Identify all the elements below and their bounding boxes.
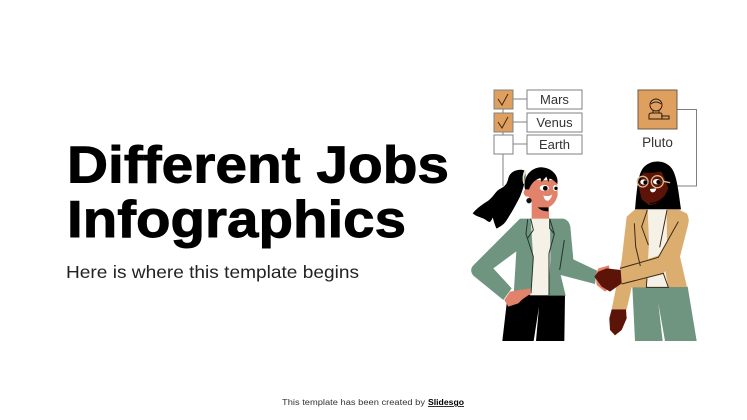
trousers (632, 287, 697, 341)
shirt (530, 219, 550, 295)
footer credit: This template has been created by (282, 398, 425, 407)
ponytail (473, 170, 525, 229)
earring (526, 198, 532, 203)
title (67, 136, 449, 249)
row: Earth: Earth (539, 137, 570, 152)
subtitle: Here is where this template begins (66, 262, 359, 282)
lapels (526, 219, 564, 295)
face and neck (638, 172, 668, 205)
trousers (502, 295, 565, 341)
Pluto card: Pluto (642, 135, 673, 150)
jacket (471, 219, 597, 300)
smile line (650, 196, 665, 203)
jacket (612, 209, 689, 309)
ear (524, 189, 532, 197)
eyes and mouth (640, 179, 647, 185)
neck (532, 200, 549, 220)
fringe hair (525, 167, 558, 189)
footer credit (282, 398, 464, 407)
hand shaking (596, 265, 612, 292)
glasses (637, 176, 670, 188)
Pluto card (638, 90, 696, 186)
hand on hip (504, 288, 531, 307)
eyes and mouth (540, 185, 549, 191)
title: Different Jobs (67, 136, 449, 194)
jacket lines (620, 210, 678, 287)
shaking hand (594, 268, 622, 292)
hair tie (524, 171, 525, 184)
neck shadow (538, 207, 548, 211)
icon: person at desk (649, 99, 669, 119)
left woman (471, 167, 612, 341)
title: Infographics (67, 191, 406, 249)
row: Mars: Mars (540, 92, 569, 107)
shirt (648, 209, 668, 287)
right woman (594, 162, 697, 341)
face (528, 180, 558, 207)
sleeve (620, 215, 689, 285)
checklist (494, 90, 582, 186)
illustration: two women shaking hands (471, 162, 697, 341)
row: Venus: Venus (536, 115, 573, 130)
footer credit: Slidesgo (428, 398, 464, 407)
hand (609, 309, 627, 335)
long hair (635, 162, 681, 209)
